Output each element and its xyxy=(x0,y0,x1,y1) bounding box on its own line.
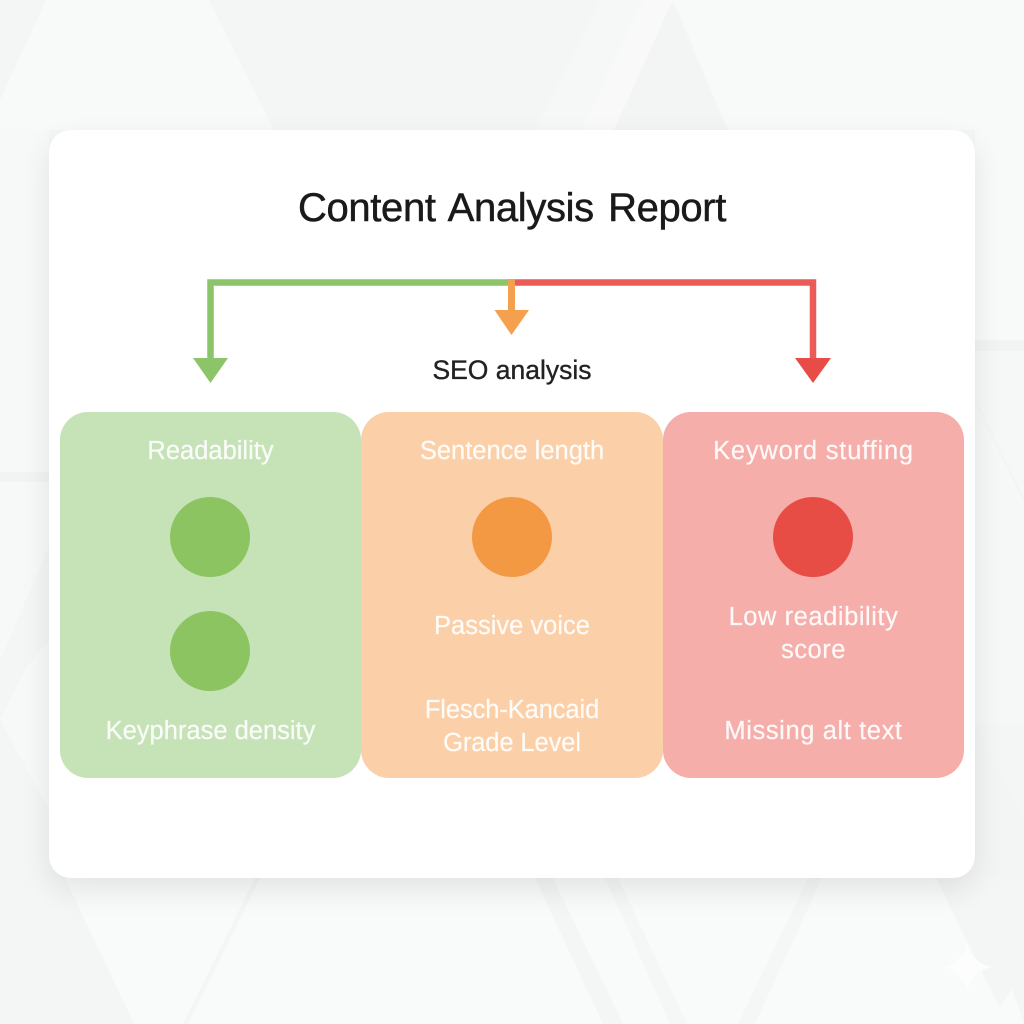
label: Flesch-Kancaid Grade Level: Flesch-Kancaid xyxy=(425,696,599,724)
label: Flesch-Kancaid Grade Level xyxy=(425,696,599,757)
label: Missing alt text: Missing alt text xyxy=(724,717,903,745)
subheading: SEO analysis xyxy=(432,355,592,385)
status dot: red xyxy=(773,497,853,577)
status dot: green 1 xyxy=(170,497,250,577)
label: Passive voice: Passive voice xyxy=(434,612,590,640)
label: Low readibility score: score xyxy=(781,636,846,664)
label: Flesch-Kancaid Grade Level: Grade Level xyxy=(443,729,581,757)
label: Keyword stuffing: Keyword stuffing xyxy=(713,437,914,465)
label: Readability: Readability xyxy=(147,437,274,465)
status dot: orange xyxy=(472,497,552,577)
label: Sentence length: Sentence length xyxy=(420,437,604,465)
status dot: green 2 xyxy=(170,611,250,691)
title: Content Analysis Report xyxy=(298,186,726,230)
icon: sparkle xyxy=(943,943,992,992)
label: Keyphrase density: Keyphrase density xyxy=(106,717,315,745)
label: Low readibility score: Low readibility xyxy=(729,603,898,631)
panel: green xyxy=(60,412,361,778)
label: Low readibility score xyxy=(729,603,898,664)
arrows: branching connector xyxy=(193,279,831,383)
report card xyxy=(49,130,975,878)
panel: orange xyxy=(361,412,663,778)
panel: red xyxy=(663,412,964,778)
